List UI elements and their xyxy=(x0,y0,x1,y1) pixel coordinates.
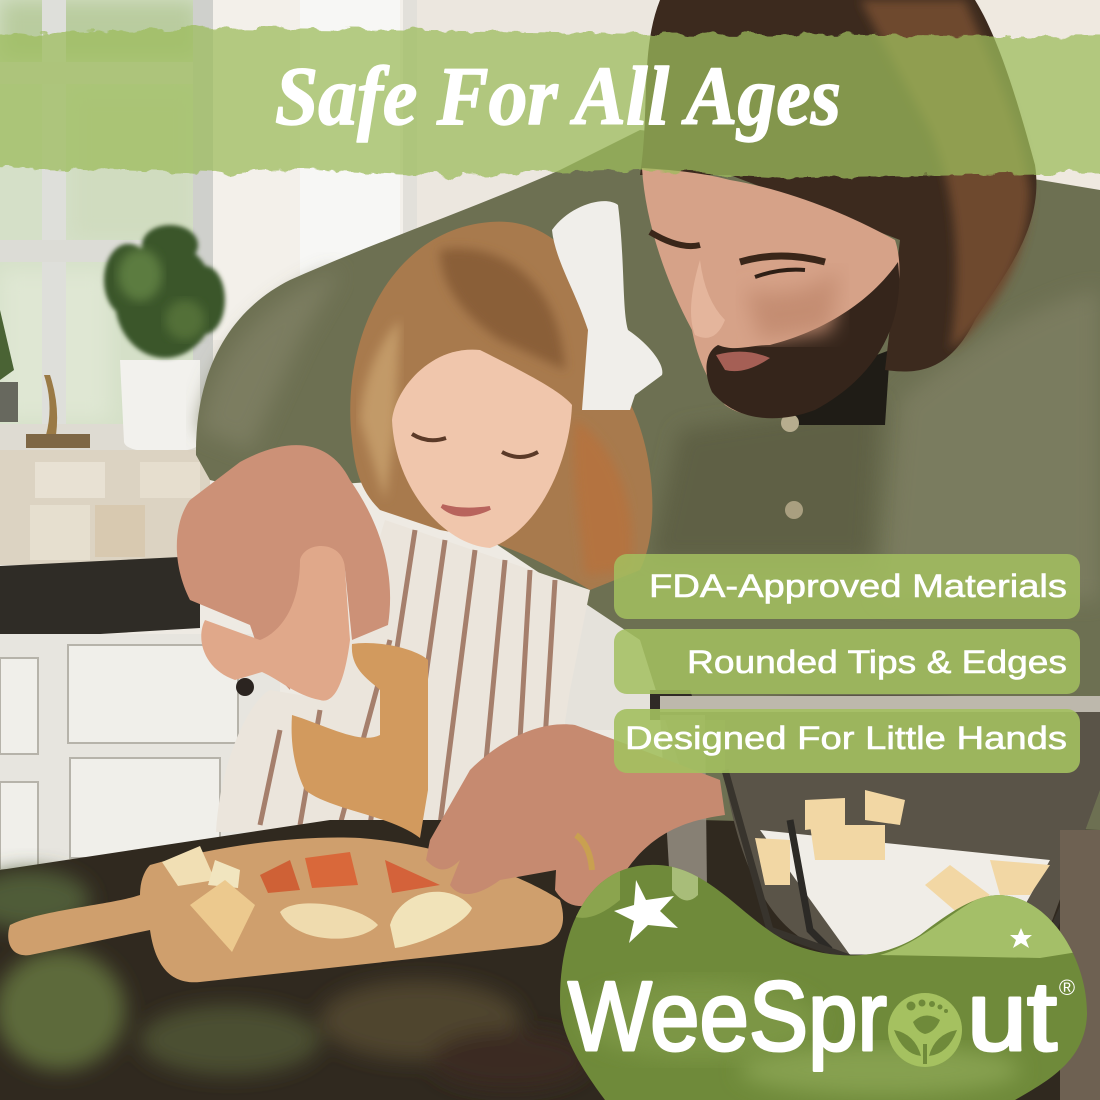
girl: eyes and mouth xyxy=(412,434,538,515)
cutting board xyxy=(8,837,563,982)
man: eye, nose and mouth details xyxy=(650,232,840,371)
wall panels xyxy=(213,0,1100,340)
counter reflections xyxy=(0,870,590,1090)
window with garden view xyxy=(0,0,213,452)
feature: Designed For Little Hands: Designed For Little Hands xyxy=(625,720,1067,756)
man left hand over girl xyxy=(177,445,390,690)
granite counter xyxy=(0,820,1100,1100)
man: beard xyxy=(706,262,899,418)
white cabinets xyxy=(0,600,1100,874)
girl hand and arm xyxy=(201,546,350,701)
logo wordmark: WeeSpr xyxy=(568,961,887,1071)
feature: FDA-Approved Materials: FDA-Approved Materials xyxy=(649,568,1067,604)
title banner xyxy=(0,28,1100,178)
feature: FDA-Approved Materials xyxy=(614,554,1080,619)
girl: hair xyxy=(350,222,652,590)
hair highlight xyxy=(860,0,1030,350)
logo blob xyxy=(550,860,1090,1100)
title: Safe For All Ages xyxy=(275,50,841,143)
girl: face xyxy=(392,350,572,548)
feature: Designed For Little Hands xyxy=(614,709,1080,773)
apron xyxy=(216,520,590,832)
stone backsplash xyxy=(0,450,210,565)
man right hand xyxy=(426,724,725,906)
white hair bow xyxy=(552,201,662,410)
back counter xyxy=(0,556,200,640)
small star xyxy=(1010,928,1032,948)
shirt shading xyxy=(200,270,1100,600)
man: face xyxy=(642,168,899,416)
blender jar xyxy=(660,695,1100,1100)
dark arm gap xyxy=(650,690,700,720)
wedding ring xyxy=(576,835,592,870)
apple slices xyxy=(162,846,472,952)
logo blob: ut xyxy=(967,961,1057,1071)
potted plant xyxy=(0,225,225,452)
man: shirt xyxy=(196,130,1100,830)
wooden knife xyxy=(292,643,428,838)
girl: hair shading xyxy=(360,248,632,575)
large star xyxy=(614,880,678,943)
logo sprout circle xyxy=(888,993,962,1067)
feature: Rounded Tips & Edges: Rounded Tips & Edges xyxy=(687,644,1067,680)
feature: Rounded Tips & Edges xyxy=(614,629,1080,694)
man: hair xyxy=(640,0,1036,372)
registered mark: ® xyxy=(1059,975,1075,1000)
